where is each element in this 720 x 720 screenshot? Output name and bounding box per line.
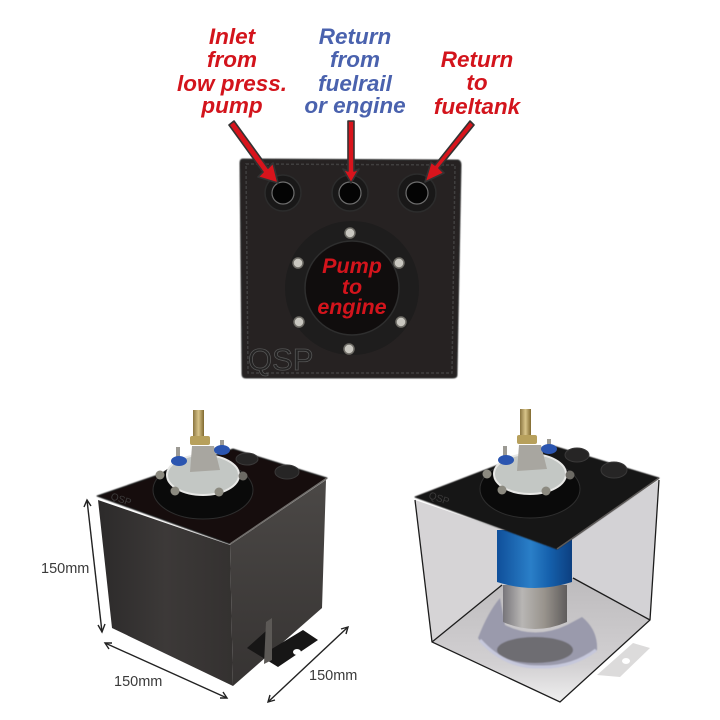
label: return to fueltank: Return (441, 47, 513, 72)
label: return from fuelrail or engine: from (330, 47, 380, 72)
tank front face (98, 500, 233, 686)
tank top face (97, 449, 327, 544)
dimension label: height: 150mm (41, 561, 89, 577)
label: return to fueltank: fueltank (434, 94, 522, 119)
port: inlet (265, 175, 301, 211)
label: inlet from low press. pump: Inlet (209, 24, 257, 49)
label: pump to engine: to (342, 275, 362, 299)
photo: top view of surge tank (240, 159, 461, 378)
label: pump to engine: engine (317, 295, 387, 319)
dimension arrow: width (105, 643, 227, 698)
tank top face (415, 445, 659, 549)
glass edges (415, 480, 659, 702)
label: return from fuelrail or engine: fuelrail (318, 71, 393, 96)
glass walls (415, 480, 659, 702)
label: inlet from low press. pump: from (207, 47, 257, 72)
photo: black tank with pump (97, 410, 327, 686)
fuel strainer (478, 598, 597, 667)
fuel pump top (153, 410, 253, 519)
mounting bracket (247, 618, 318, 667)
port: return to fueltank (398, 174, 436, 212)
pump body: blue (497, 530, 572, 588)
pump body: silver (503, 585, 567, 629)
tank side face (230, 480, 326, 686)
lid ports (236, 453, 299, 479)
port: return from fuelrail (332, 175, 368, 211)
tank top plate (240, 159, 461, 378)
dimension arrow: depth (268, 627, 348, 702)
logo: QSP: QSP (248, 342, 313, 377)
dimension label: width: 150mm (114, 674, 162, 690)
label: inlet from low press. pump: pump (200, 93, 263, 118)
label: inlet from low press. pump: low press. (177, 71, 287, 96)
pump flange (285, 221, 419, 355)
arrow: return from fuelrail (343, 121, 359, 183)
lid ports (565, 448, 627, 478)
label: return to fueltank: to (466, 70, 488, 95)
label: return from fuelrail or engine: Return (319, 24, 391, 49)
label: return from fuelrail or engine: or engine (304, 93, 406, 118)
mounting bracket (597, 643, 650, 677)
dimension arrow: height (84, 500, 105, 632)
arrow: return to fueltank (425, 121, 474, 182)
logo on lid: QSP (427, 490, 451, 508)
fuel pump top (480, 409, 580, 518)
photo: transparent tank with pump (415, 409, 659, 702)
arrow: inlet (229, 121, 278, 183)
logo on lid: QSP (109, 491, 133, 509)
dimension label: depth: 150mm (309, 668, 357, 684)
flange bolts (293, 228, 406, 354)
label: pump to engine: Pump (322, 254, 382, 278)
